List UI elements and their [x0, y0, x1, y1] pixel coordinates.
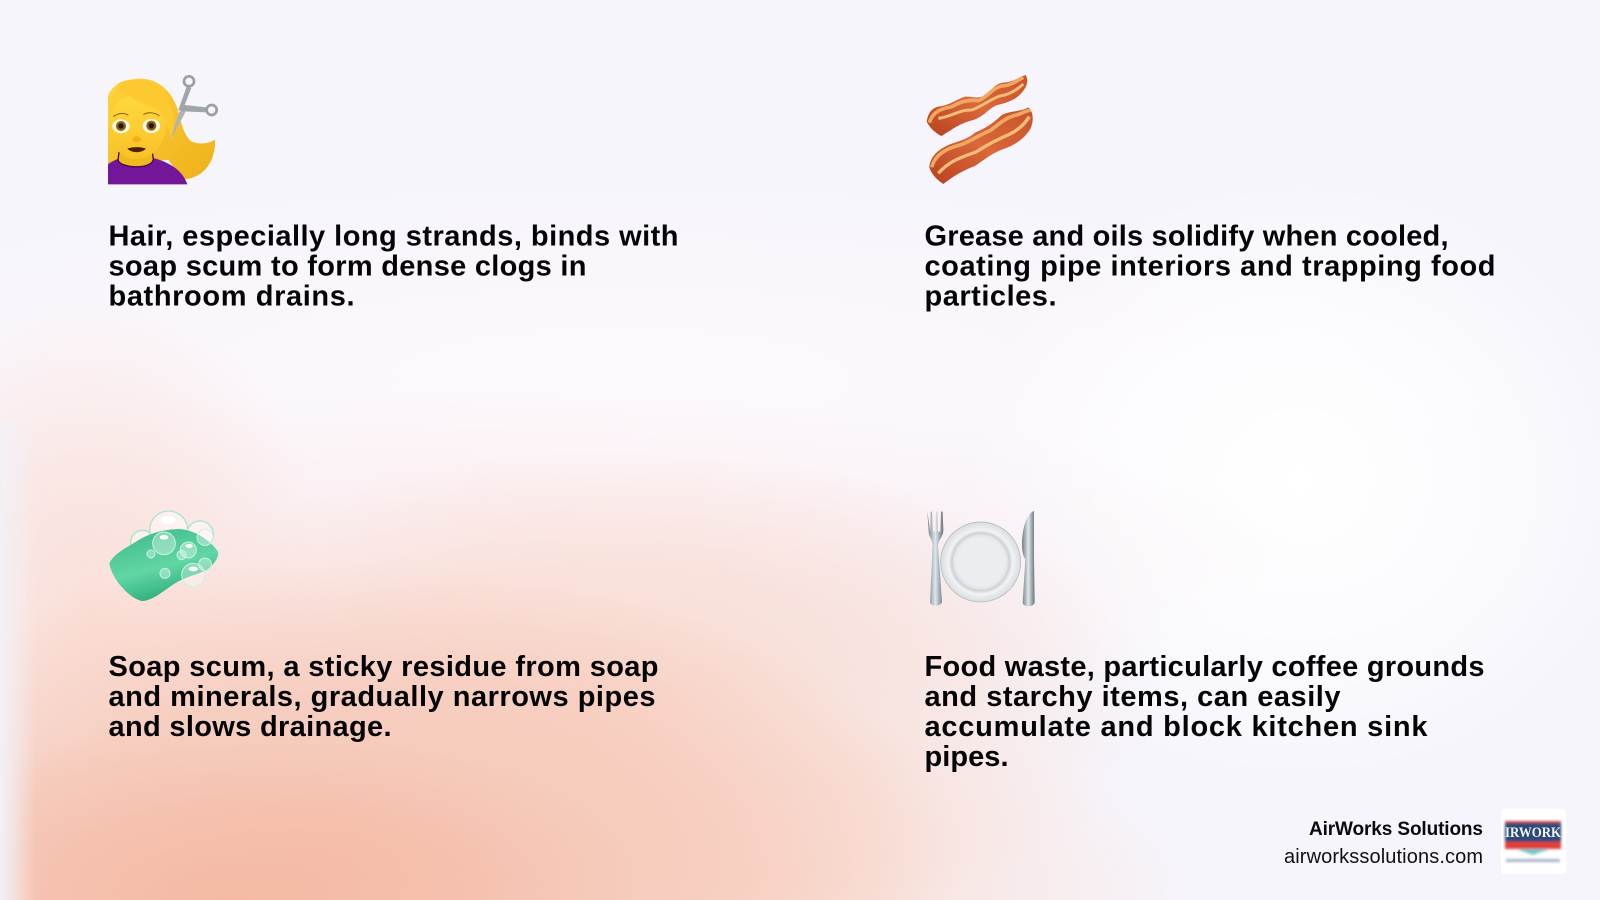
text: hair: soap scum to form dense clogs in [108, 250, 586, 282]
text: grease: coating pipe interiors and trapping food [924, 250, 1496, 282]
text: hair: bathroom drains. [108, 280, 354, 312]
footer: brand [1284, 809, 1566, 874]
text: food: pipes. [924, 741, 1008, 773]
scissors [170, 76, 217, 140]
icon: woman getting a haircut [108, 76, 217, 184]
text: food: Food waste, particularly coffee grounds [924, 651, 1484, 683]
panel: soap [108, 511, 658, 743]
text: grease: Grease and oils solidify when cooled, [924, 220, 1448, 252]
panel: grease [924, 75, 1496, 312]
text: grease: particles. [924, 280, 1056, 312]
text: hair: Hair, especially long strands, binds with [108, 220, 678, 252]
text: soap: Soap scum, a sticky residue from soap [108, 651, 658, 683]
icon: fork, plate and knife [927, 511, 1035, 606]
icon: bacon [927, 75, 1033, 184]
icon: soap with bubbles [109, 511, 218, 601]
panel: hair [108, 76, 678, 313]
logo [1501, 809, 1566, 874]
text: grease [924, 220, 1496, 312]
panel: food [924, 511, 1484, 773]
brand website: airworkssolutions.com [1284, 846, 1483, 868]
brand name: AirWorks Solutions [1309, 819, 1483, 840]
text: soap [108, 651, 658, 743]
text: soap: and slows drainage. [108, 711, 392, 743]
text: food: accumulate and block kitchen sink [924, 711, 1428, 743]
text: hair [108, 220, 678, 312]
text: soap: and minerals, gradually narrows pipes [108, 681, 656, 713]
text: food [924, 651, 1484, 773]
text: food: and starchy items, can easily [924, 681, 1340, 713]
